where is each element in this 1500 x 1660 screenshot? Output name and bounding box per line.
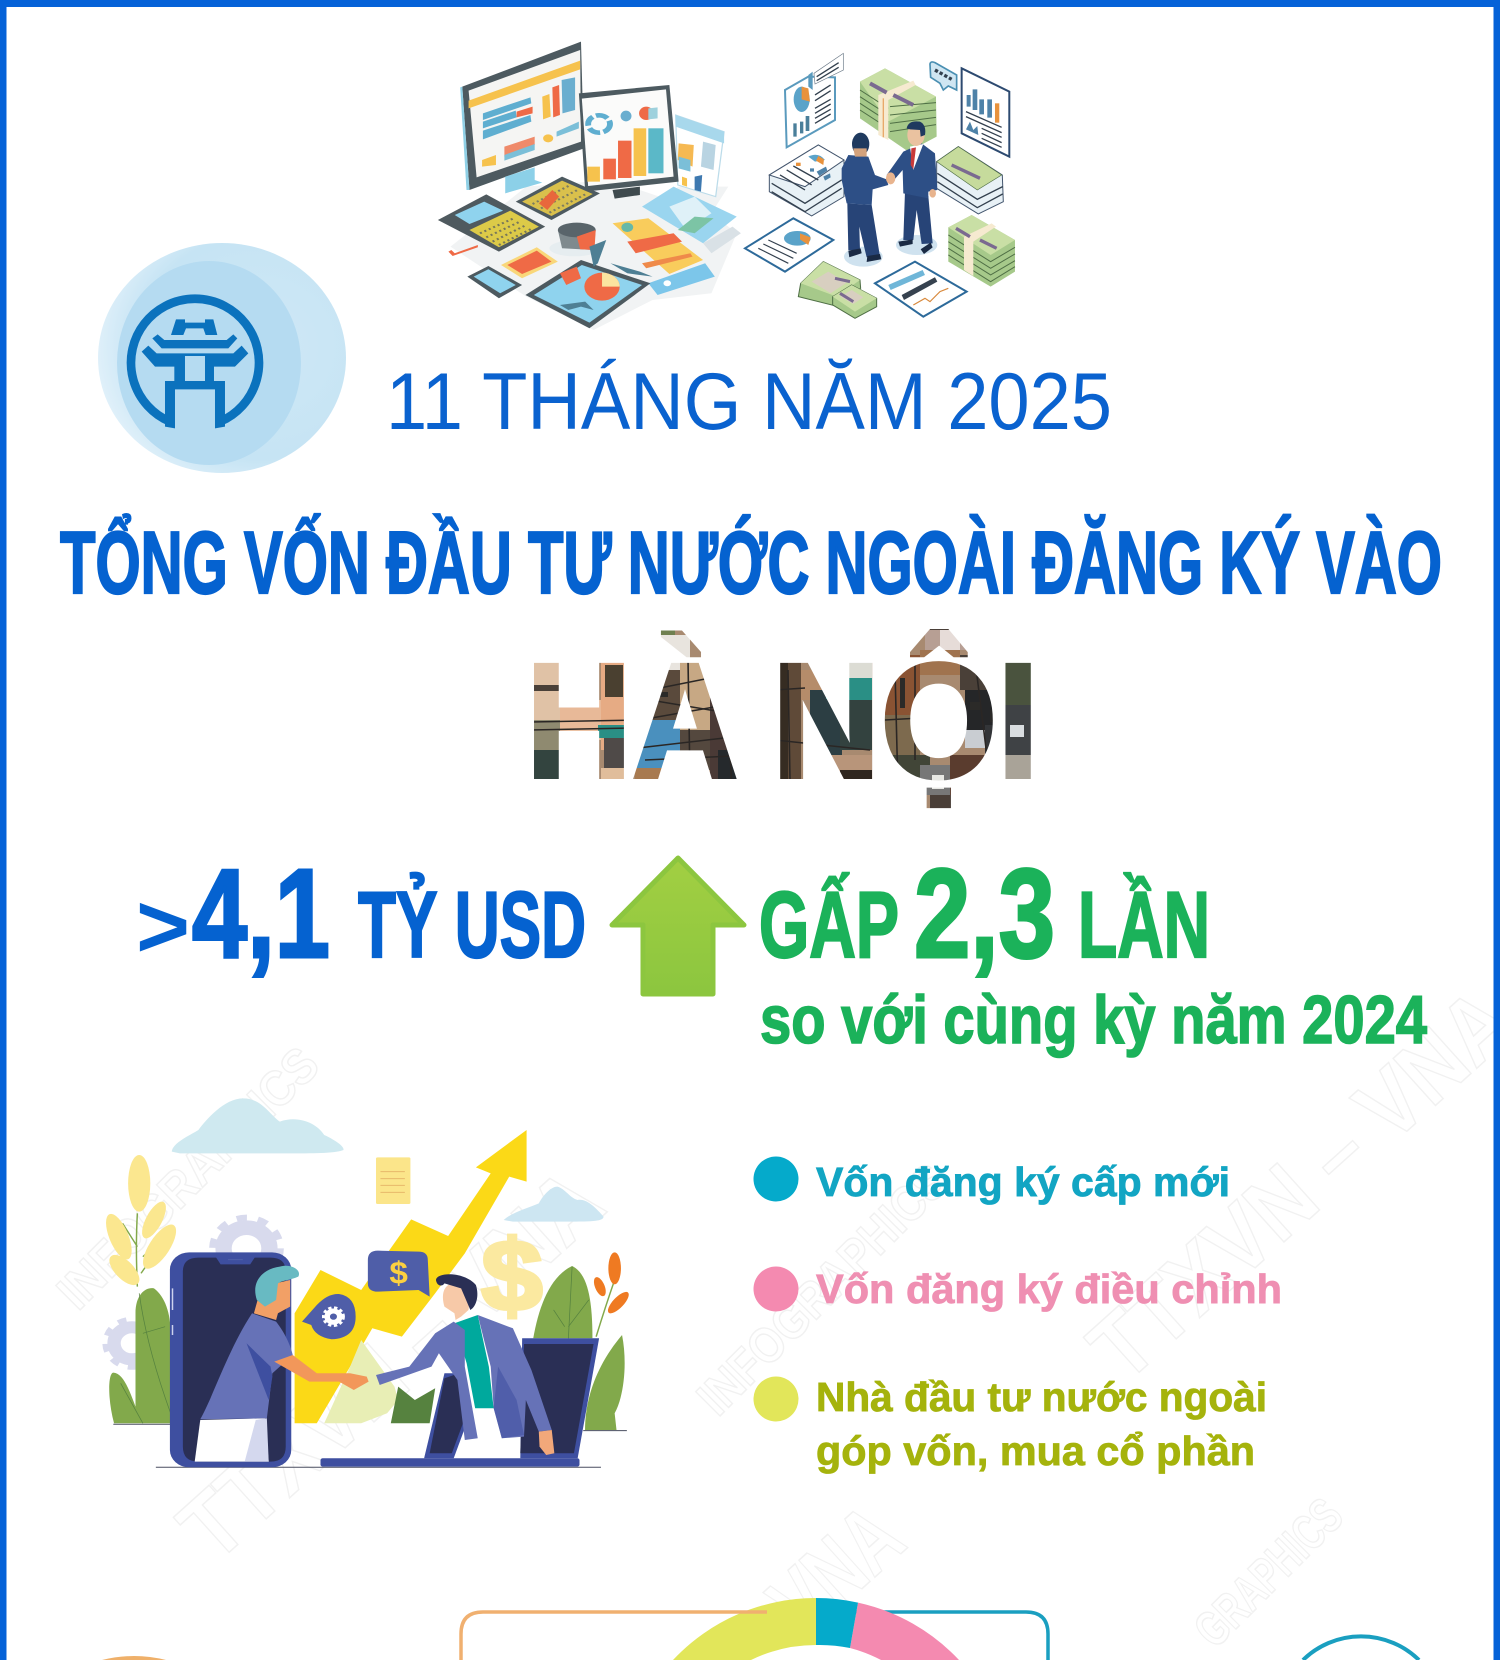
icon: green up arrow xyxy=(612,858,744,994)
report with bar chart xyxy=(962,68,1009,157)
arrow xyxy=(295,1130,527,1423)
statistic: growth multiple xyxy=(759,843,1427,1058)
monitor xyxy=(462,42,584,190)
money stack right xyxy=(948,215,1015,287)
orange frame line xyxy=(461,1612,767,1660)
statistic: growth multiple: LẦN xyxy=(1078,872,1210,977)
legend item: new registered capital: Vốn đăng ký cấp mới xyxy=(816,1159,1230,1205)
watermark: GRAPHICS xyxy=(1183,1487,1354,1658)
paper stack left xyxy=(769,145,844,216)
blue frame line xyxy=(855,1612,1048,1660)
legend item: foreign investors contributions: góp vốn, mua cổ phần xyxy=(816,1428,1255,1474)
banknote document 500000 xyxy=(875,262,967,317)
right circle top xyxy=(1303,1636,1419,1660)
watermark: TTXVN – VNA xyxy=(160,1149,622,1580)
bubbles xyxy=(368,1251,430,1297)
watermark: INFOGRAPHICS xyxy=(46,1036,330,1320)
money stack top xyxy=(860,68,937,152)
report with pie lying xyxy=(745,218,833,272)
watermark xyxy=(46,969,1500,1658)
left circle top xyxy=(102,1656,166,1660)
subtitle: 11 THÁNG NĂM 2025 xyxy=(386,357,1112,447)
money bottom xyxy=(798,262,861,307)
illustration: handshake growth xyxy=(101,1098,632,1467)
legend item: adjusted capital: Vốn đăng ký điều chỉnh xyxy=(816,1266,1282,1312)
person right xyxy=(452,1408,520,1453)
paper stack with banknote right xyxy=(937,147,1003,214)
logo: Hanoi emblem on circle xyxy=(98,243,346,473)
man right xyxy=(903,192,933,244)
laptop xyxy=(520,1338,599,1458)
donut segment: adjusted capital xyxy=(850,1603,959,1660)
report with pie chart xyxy=(785,77,835,147)
statistic: total capital: > xyxy=(136,877,190,977)
illustration: businessmen handshake with money and reports xyxy=(745,53,1015,318)
donut chart xyxy=(673,1598,959,1660)
note xyxy=(376,1157,410,1204)
man left xyxy=(847,203,880,257)
legend item: foreign investors contributions xyxy=(754,1374,1267,1474)
legend xyxy=(754,1156,1282,1474)
statistic: total capital: TỶ USD xyxy=(358,872,586,977)
logo emblem xyxy=(131,299,259,428)
illustration: handshake growth: $ xyxy=(389,1256,408,1291)
person left xyxy=(195,1418,269,1462)
dollar: $ xyxy=(481,1220,543,1332)
city name: HÀ NỘI with photo fill xyxy=(526,629,1039,812)
city name: HÀ NỘI with photo fill: NỘI xyxy=(772,629,1039,812)
shadows xyxy=(844,247,883,267)
watermark: VNA xyxy=(750,1485,922,1655)
plants xyxy=(109,1288,171,1423)
ground lines xyxy=(113,1424,627,1467)
city name: HÀ NỘI with photo fill: HÀ xyxy=(526,629,738,812)
statistic: total capital: 4,1 xyxy=(192,843,330,984)
speech bubble icon xyxy=(930,62,957,90)
statistic: growth multiple: GẤP xyxy=(759,871,899,977)
donut segment: new capital xyxy=(816,1598,858,1648)
cloud xyxy=(172,1098,344,1153)
logo background xyxy=(98,243,346,473)
statistic: growth multiple: 2,3 xyxy=(914,843,1055,984)
donut segment: foreign investors xyxy=(673,1598,816,1660)
phone xyxy=(170,1252,291,1467)
legend item: foreign investors contributions: Nhà đầu tư nước ngoài xyxy=(816,1374,1267,1420)
illustration: finance desk xyxy=(438,42,741,330)
watermark: INFOGRAPHICS xyxy=(686,1153,959,1426)
statistic: total capital xyxy=(136,843,586,984)
gears xyxy=(224,1228,269,1269)
